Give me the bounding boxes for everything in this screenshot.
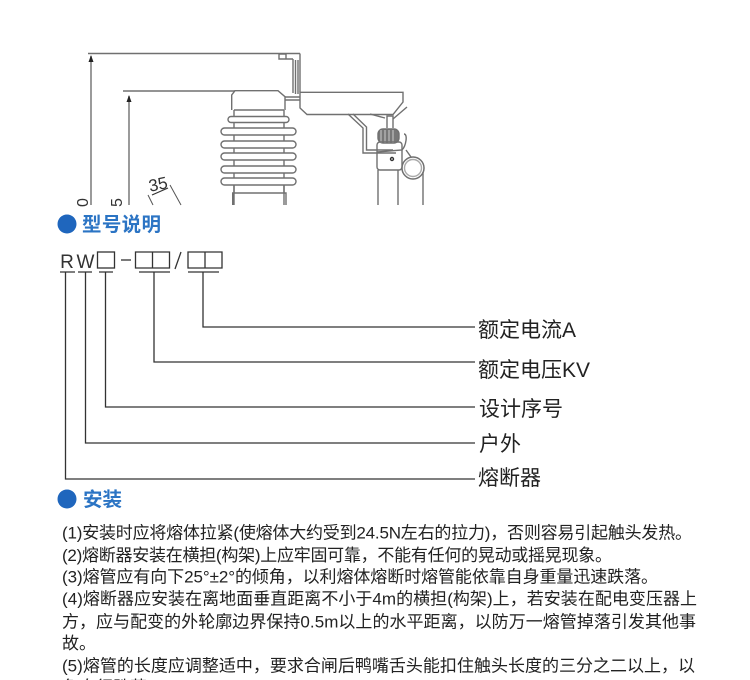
installation instructions: (2)熔断器安装在横担(构架)上应牢固可靠，不能有任何的晃动或摇晃现象。	[62, 546, 612, 565]
installation instructions: 故。	[62, 634, 96, 653]
model code characters	[60, 252, 222, 273]
lower arm	[300, 92, 403, 114]
heading: model description: 型号说明	[82, 214, 161, 236]
leader: rated voltage	[154, 272, 475, 362]
leader: rated current	[203, 272, 475, 327]
insulator body	[221, 91, 296, 205]
label: rated voltage: 额定电压KV	[478, 359, 590, 382]
contact assembly	[348, 107, 424, 205]
label: design serial: 设计序号	[479, 398, 563, 421]
installation instructions: (5)熔管的长度应调整适中，要求合闸后鸭嘴舌头能扣住触头长度的三分之二以上，以	[62, 656, 695, 676]
leader: outdoor	[86, 272, 475, 443]
model code diagram	[60, 252, 475, 479]
label: fuse: 熔断器	[478, 467, 541, 490]
dimension lines: 5	[109, 198, 126, 207]
dimension lines: 35	[147, 173, 169, 196]
installation instructions: (4)熔断器应安装在离地面垂直距离不小于4m的横担(构架)上，若安装在配电变压器上	[62, 590, 697, 608]
installation instructions: (3)熔管应有向下25°±2°的倾角，以利熔体熔断时熔管能依靠自身重量迅速跌落。	[62, 568, 658, 586]
upper bracket	[279, 54, 300, 100]
technical drawing: fuse cutout	[75, 54, 424, 207]
heading: installation	[58, 489, 122, 511]
leader: design serial	[106, 272, 475, 407]
model code characters: R	[60, 252, 74, 273]
label: rated current: 额定电流A	[478, 319, 576, 342]
leader: fuse	[66, 272, 475, 479]
installation instructions	[62, 522, 697, 680]
installation instructions: 方，应与配变的外轮廓边界保持0.5m以上的水平距离，以防万一熔管掉落引发其他事	[62, 612, 696, 632]
label: outdoor: 户外	[479, 433, 521, 456]
dimension lines	[75, 54, 300, 207]
underlines	[60, 271, 219, 273]
installation instructions: (1)安装时应将熔体拉紧(使熔体大约受到24.5N左右的拉力)，否则容易引起触头发热。	[62, 522, 692, 542]
model code characters: W	[77, 252, 95, 273]
dimension lines: 0	[75, 198, 92, 207]
heading: installation: 安装	[83, 489, 122, 511]
